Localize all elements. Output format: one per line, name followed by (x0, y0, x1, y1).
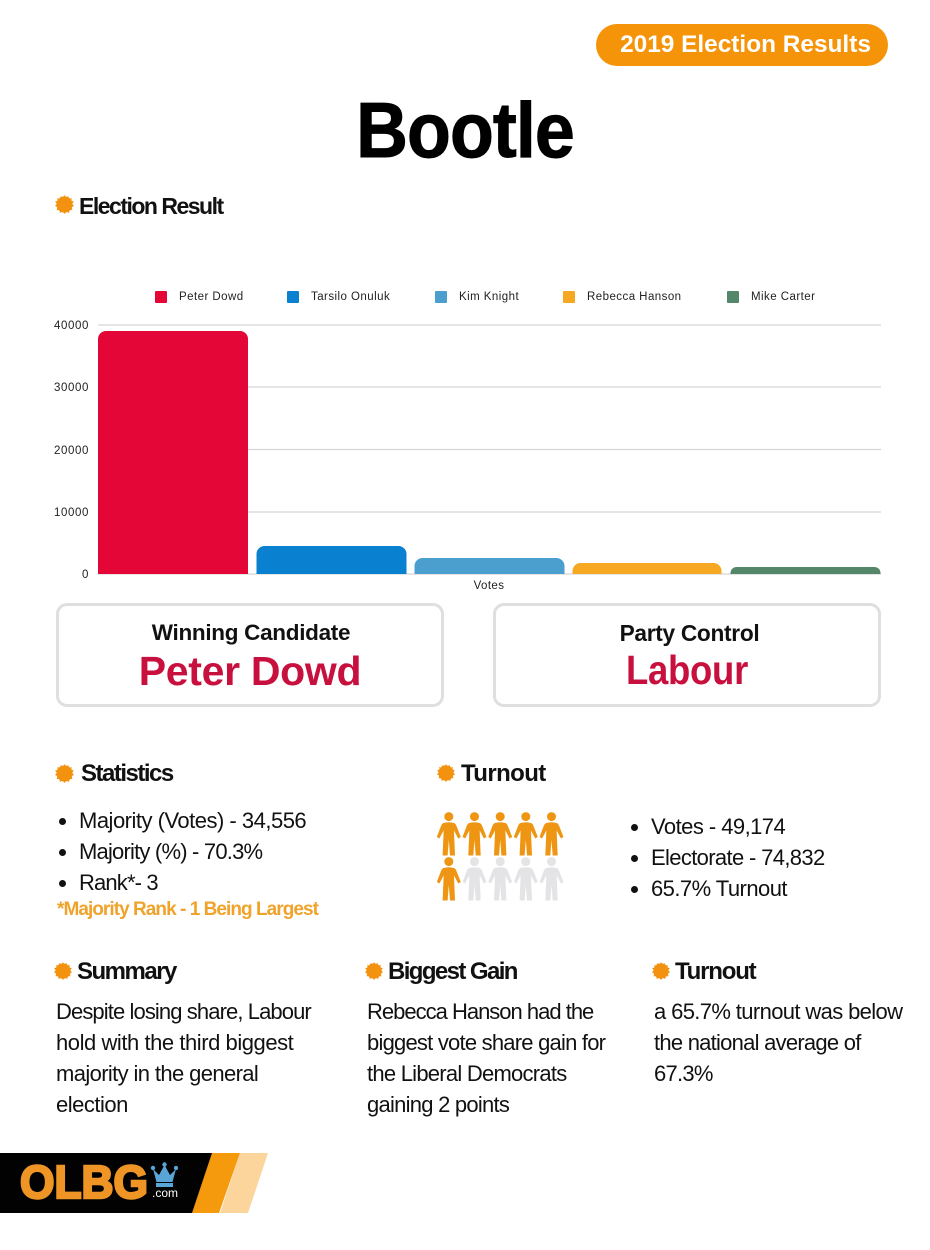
icon: people turnout pictogram (437, 812, 564, 900)
heading: Election Result: Election Result (79, 193, 223, 219)
biggest gain text: Rebecca Hanson had the (367, 999, 593, 1024)
summary text: hold with the third biggest (56, 1030, 293, 1055)
summary text: majority in the general (56, 1061, 258, 1086)
heading: Turnout: Turnout (461, 760, 546, 787)
label: winning candidate: Winning Candidate (152, 620, 350, 645)
biggest gain text: gaining 2 points (367, 1092, 509, 1117)
legend (155, 291, 815, 303)
biggest gain text: biggest vote share gain for (367, 1030, 605, 1055)
badge: 2019 Election Results (596, 24, 888, 66)
statistics list (59, 808, 306, 895)
biggest gain text (367, 999, 606, 1117)
label: party control: Party Control (620, 620, 759, 646)
y axis labels: 0 (82, 569, 89, 581)
legend: Kim Knight (459, 291, 519, 303)
rank footnote: *Majority Rank - 1 Being Largest (57, 899, 318, 920)
legend: Rebecca Hanson (587, 291, 682, 303)
value: Labour: Labour (626, 647, 748, 693)
value: Peter Dowd: Peter Dowd (139, 648, 361, 694)
bar chart (54, 291, 881, 592)
heading: Turnout summary: Turnout (675, 958, 755, 985)
heading: Summary: Summary (77, 958, 176, 985)
y axis labels: 20000 (54, 445, 89, 457)
y axis labels (54, 320, 89, 581)
panel: party control (493, 603, 881, 707)
logo: OLBG.com (0, 1153, 268, 1213)
y axis labels: 30000 (54, 382, 89, 394)
x axis label: Votes (474, 580, 504, 592)
turnout text: a 65.7% turnout was below (654, 999, 902, 1024)
legend: Mike Carter (751, 291, 815, 303)
turnout text: the national average of (654, 1030, 861, 1055)
biggest gain text: the Liberal Democrats (367, 1061, 566, 1086)
legend: Peter Dowd (179, 291, 244, 303)
turnout text: 67.3% (654, 1061, 713, 1086)
legend: Tarsilo Onuluk (311, 291, 390, 303)
y axis labels: 10000 (54, 507, 89, 519)
icon: crown (151, 1162, 178, 1187)
statistics list: Majority (%) - 70.3% (79, 839, 262, 864)
statistics list: Rank*- 3 (79, 870, 158, 895)
panel: winning candidate (56, 603, 444, 707)
turnout list (631, 814, 825, 901)
turnout text (654, 999, 903, 1086)
heading: Biggest Gain: Biggest Gain (388, 958, 517, 985)
logo: OLBG.com: .com (152, 1186, 178, 1200)
y axis labels: 40000 (54, 320, 89, 332)
turnout list: 65.7% Turnout (651, 876, 787, 901)
summary text: election (56, 1092, 128, 1117)
badge: 2019 Election Results: 2019 Election Results (620, 31, 871, 58)
title: Bootle (356, 86, 574, 174)
turnout list: Electorate - 74,832 (651, 845, 825, 870)
heading: Statistics: Statistics (81, 760, 173, 787)
bars (98, 331, 880, 574)
summary text: Despite losing share, Labour (56, 999, 311, 1024)
summary text (56, 999, 312, 1117)
statistics list: Majority (Votes) - 34,556 (79, 808, 306, 833)
turnout list: Votes - 49,174 (651, 814, 785, 839)
logo: OLBG.com: OLBG (20, 1156, 148, 1208)
